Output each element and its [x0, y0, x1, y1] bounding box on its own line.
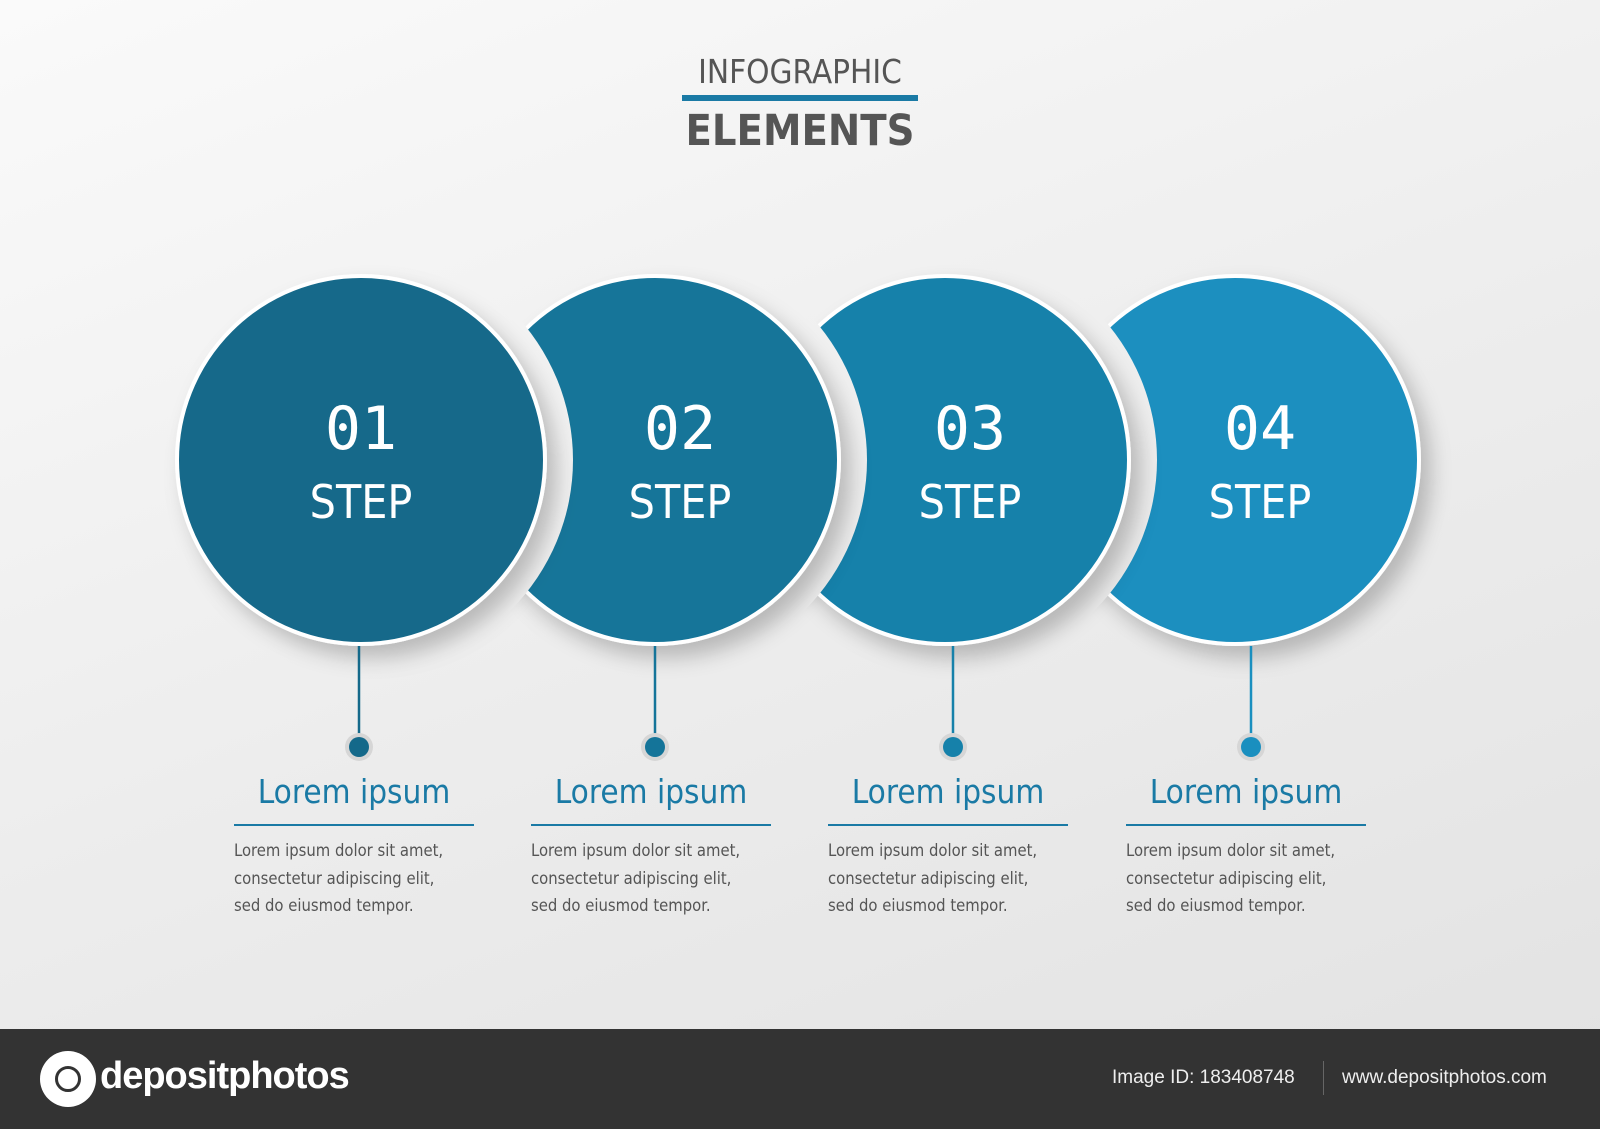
title line 2: ELEMENTS	[685, 106, 915, 156]
text block 1: sed do eiusmod tempor.	[234, 896, 414, 915]
step 2 circle: 02	[644, 394, 716, 464]
step 2 circle	[471, 276, 839, 644]
step 4 circle: 04	[1224, 394, 1296, 464]
text block 4: sed do eiusmod tempor.	[1126, 896, 1306, 915]
connector 3	[939, 646, 967, 761]
footer logo: depositphotos	[100, 1055, 349, 1097]
title line 1: INFOGRAPHIC	[698, 52, 902, 91]
text block 4: Lorem ipsum	[1150, 772, 1342, 811]
footer image id: Image ID: 183408748	[1112, 1067, 1295, 1088]
text block 2: sed do eiusmod tempor.	[531, 896, 711, 915]
text block 1: Lorem ipsum dolor sit amet,	[234, 841, 443, 860]
connector 4	[1237, 646, 1265, 761]
text block 4	[1126, 772, 1366, 915]
step 3 circle: 03	[934, 394, 1006, 464]
text block 1: consectetur adipiscing elit,	[234, 868, 434, 888]
step 1 circle	[177, 276, 545, 644]
text block 3: Lorem ipsum	[852, 772, 1044, 811]
text block 1: Lorem ipsum	[258, 772, 450, 811]
step 4 circle	[1051, 276, 1419, 644]
connector 1	[345, 646, 373, 761]
text block 3: sed do eiusmod tempor.	[828, 896, 1008, 915]
text block 3: consectetur adipiscing elit,	[828, 868, 1028, 888]
step 3 circle: STEP	[919, 475, 1021, 529]
text block 2: consectetur adipiscing elit,	[531, 868, 731, 888]
text block 1	[234, 772, 474, 915]
text block 4: Lorem ipsum dolor sit amet,	[1126, 841, 1335, 860]
text block 3	[828, 772, 1068, 915]
step 3 circle	[761, 276, 1129, 644]
connector 2	[641, 646, 669, 761]
text block 3: Lorem ipsum dolor sit amet,	[828, 841, 1037, 860]
text block 2: Lorem ipsum	[555, 772, 747, 811]
text block 2	[531, 772, 771, 915]
text block 4: consectetur adipiscing elit,	[1126, 868, 1326, 888]
steps diagram	[175, 274, 1441, 761]
footer url: www.depositphotos.com	[1342, 1067, 1547, 1088]
step 2 circle: STEP	[629, 475, 731, 529]
footer logo	[40, 1051, 349, 1107]
text block 2: Lorem ipsum dolor sit amet,	[531, 841, 740, 860]
footer	[0, 1029, 1600, 1129]
title	[682, 52, 918, 156]
step 4 circle: STEP	[1209, 475, 1311, 529]
step 1 circle: STEP	[310, 475, 412, 529]
step 1 circle: 01	[325, 394, 397, 464]
title bar	[682, 95, 918, 101]
